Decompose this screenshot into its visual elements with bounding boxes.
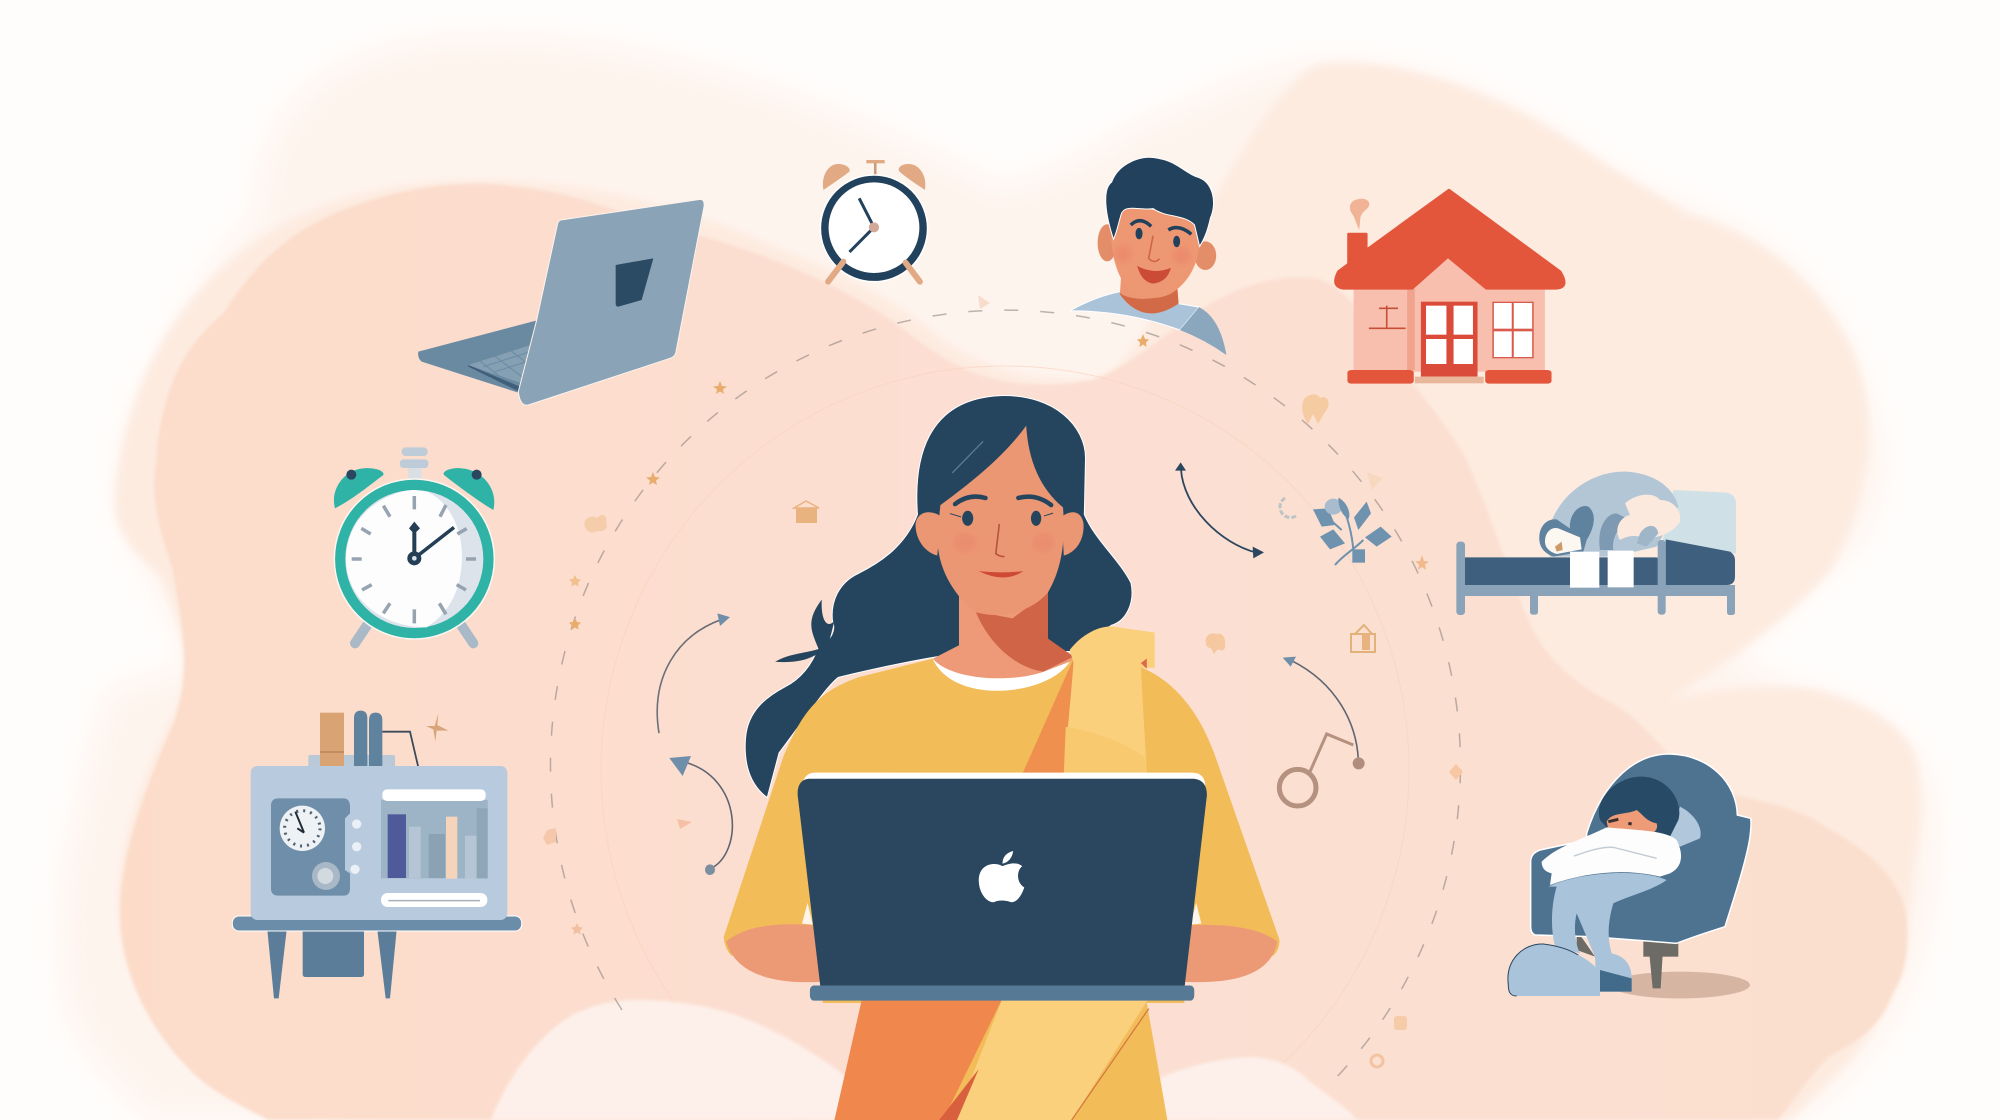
gaps beside laptop	[802, 903, 1201, 925]
icon: teal alarm clock	[334, 447, 494, 643]
neck	[1120, 275, 1179, 312]
walls	[1354, 257, 1545, 372]
hair	[1106, 157, 1214, 246]
facial features	[1114, 221, 1191, 284]
saree sash on shoulder	[1022, 626, 1155, 774]
dashed orbit ring	[550, 310, 1460, 1082]
icon: red roof house	[1335, 190, 1564, 384]
arrows left of the woman	[657, 613, 732, 875]
shirt	[1070, 291, 1199, 330]
chair legs	[1577, 930, 1678, 988]
white collar	[933, 658, 1070, 691]
icon: person asleep in armchair	[1508, 754, 1751, 998]
legs in blue pajamas	[1548, 873, 1667, 992]
woman with laptop	[724, 396, 1279, 1120]
clock knob	[400, 447, 428, 483]
arrows and icons right of the woman	[1175, 462, 1392, 806]
books	[308, 711, 448, 775]
neck	[933, 588, 1074, 685]
apple logo	[979, 851, 1024, 902]
shadow	[1610, 972, 1750, 998]
clock hands	[407, 522, 454, 565]
clock feet	[355, 623, 473, 643]
forearms	[726, 924, 1277, 982]
small decorative marks	[543, 295, 1463, 1067]
face	[1111, 198, 1200, 298]
desk control panel	[271, 798, 361, 896]
armchair	[1531, 754, 1751, 943]
icon: smiling man portrait	[1070, 157, 1226, 355]
desk legs and drawer	[267, 928, 397, 998]
foundation	[1347, 370, 1552, 384]
icon: desk with dashboard	[232, 711, 522, 998]
facial features	[950, 441, 1054, 578]
small house glyphs	[794, 501, 1375, 652]
white blanket	[1542, 827, 1681, 885]
body and shirt	[724, 658, 1279, 1120]
clock ticks	[352, 496, 476, 623]
long hair	[745, 396, 1132, 798]
ring and stick symbol	[1279, 734, 1353, 806]
slipper	[1600, 970, 1632, 992]
roof	[1335, 190, 1564, 288]
ears	[915, 512, 1084, 556]
icon: leaf sprig	[1313, 498, 1392, 565]
icon: open laptop seen from behind	[418, 199, 704, 405]
bar chart	[381, 789, 488, 907]
double headed arrow	[1175, 462, 1264, 558]
ears	[1098, 224, 1216, 270]
smoke	[1350, 199, 1369, 230]
curved arrow	[1283, 657, 1365, 769]
clock bells	[334, 468, 494, 510]
face	[937, 426, 1064, 615]
saree lower	[834, 998, 1149, 1120]
window	[1492, 302, 1534, 358]
hair ribbon	[775, 599, 834, 662]
icon: navy clock with tan bells	[820, 160, 928, 282]
laptop	[798, 773, 1207, 1001]
door	[1421, 302, 1478, 377]
icon: person curled on bed	[1456, 472, 1736, 615]
